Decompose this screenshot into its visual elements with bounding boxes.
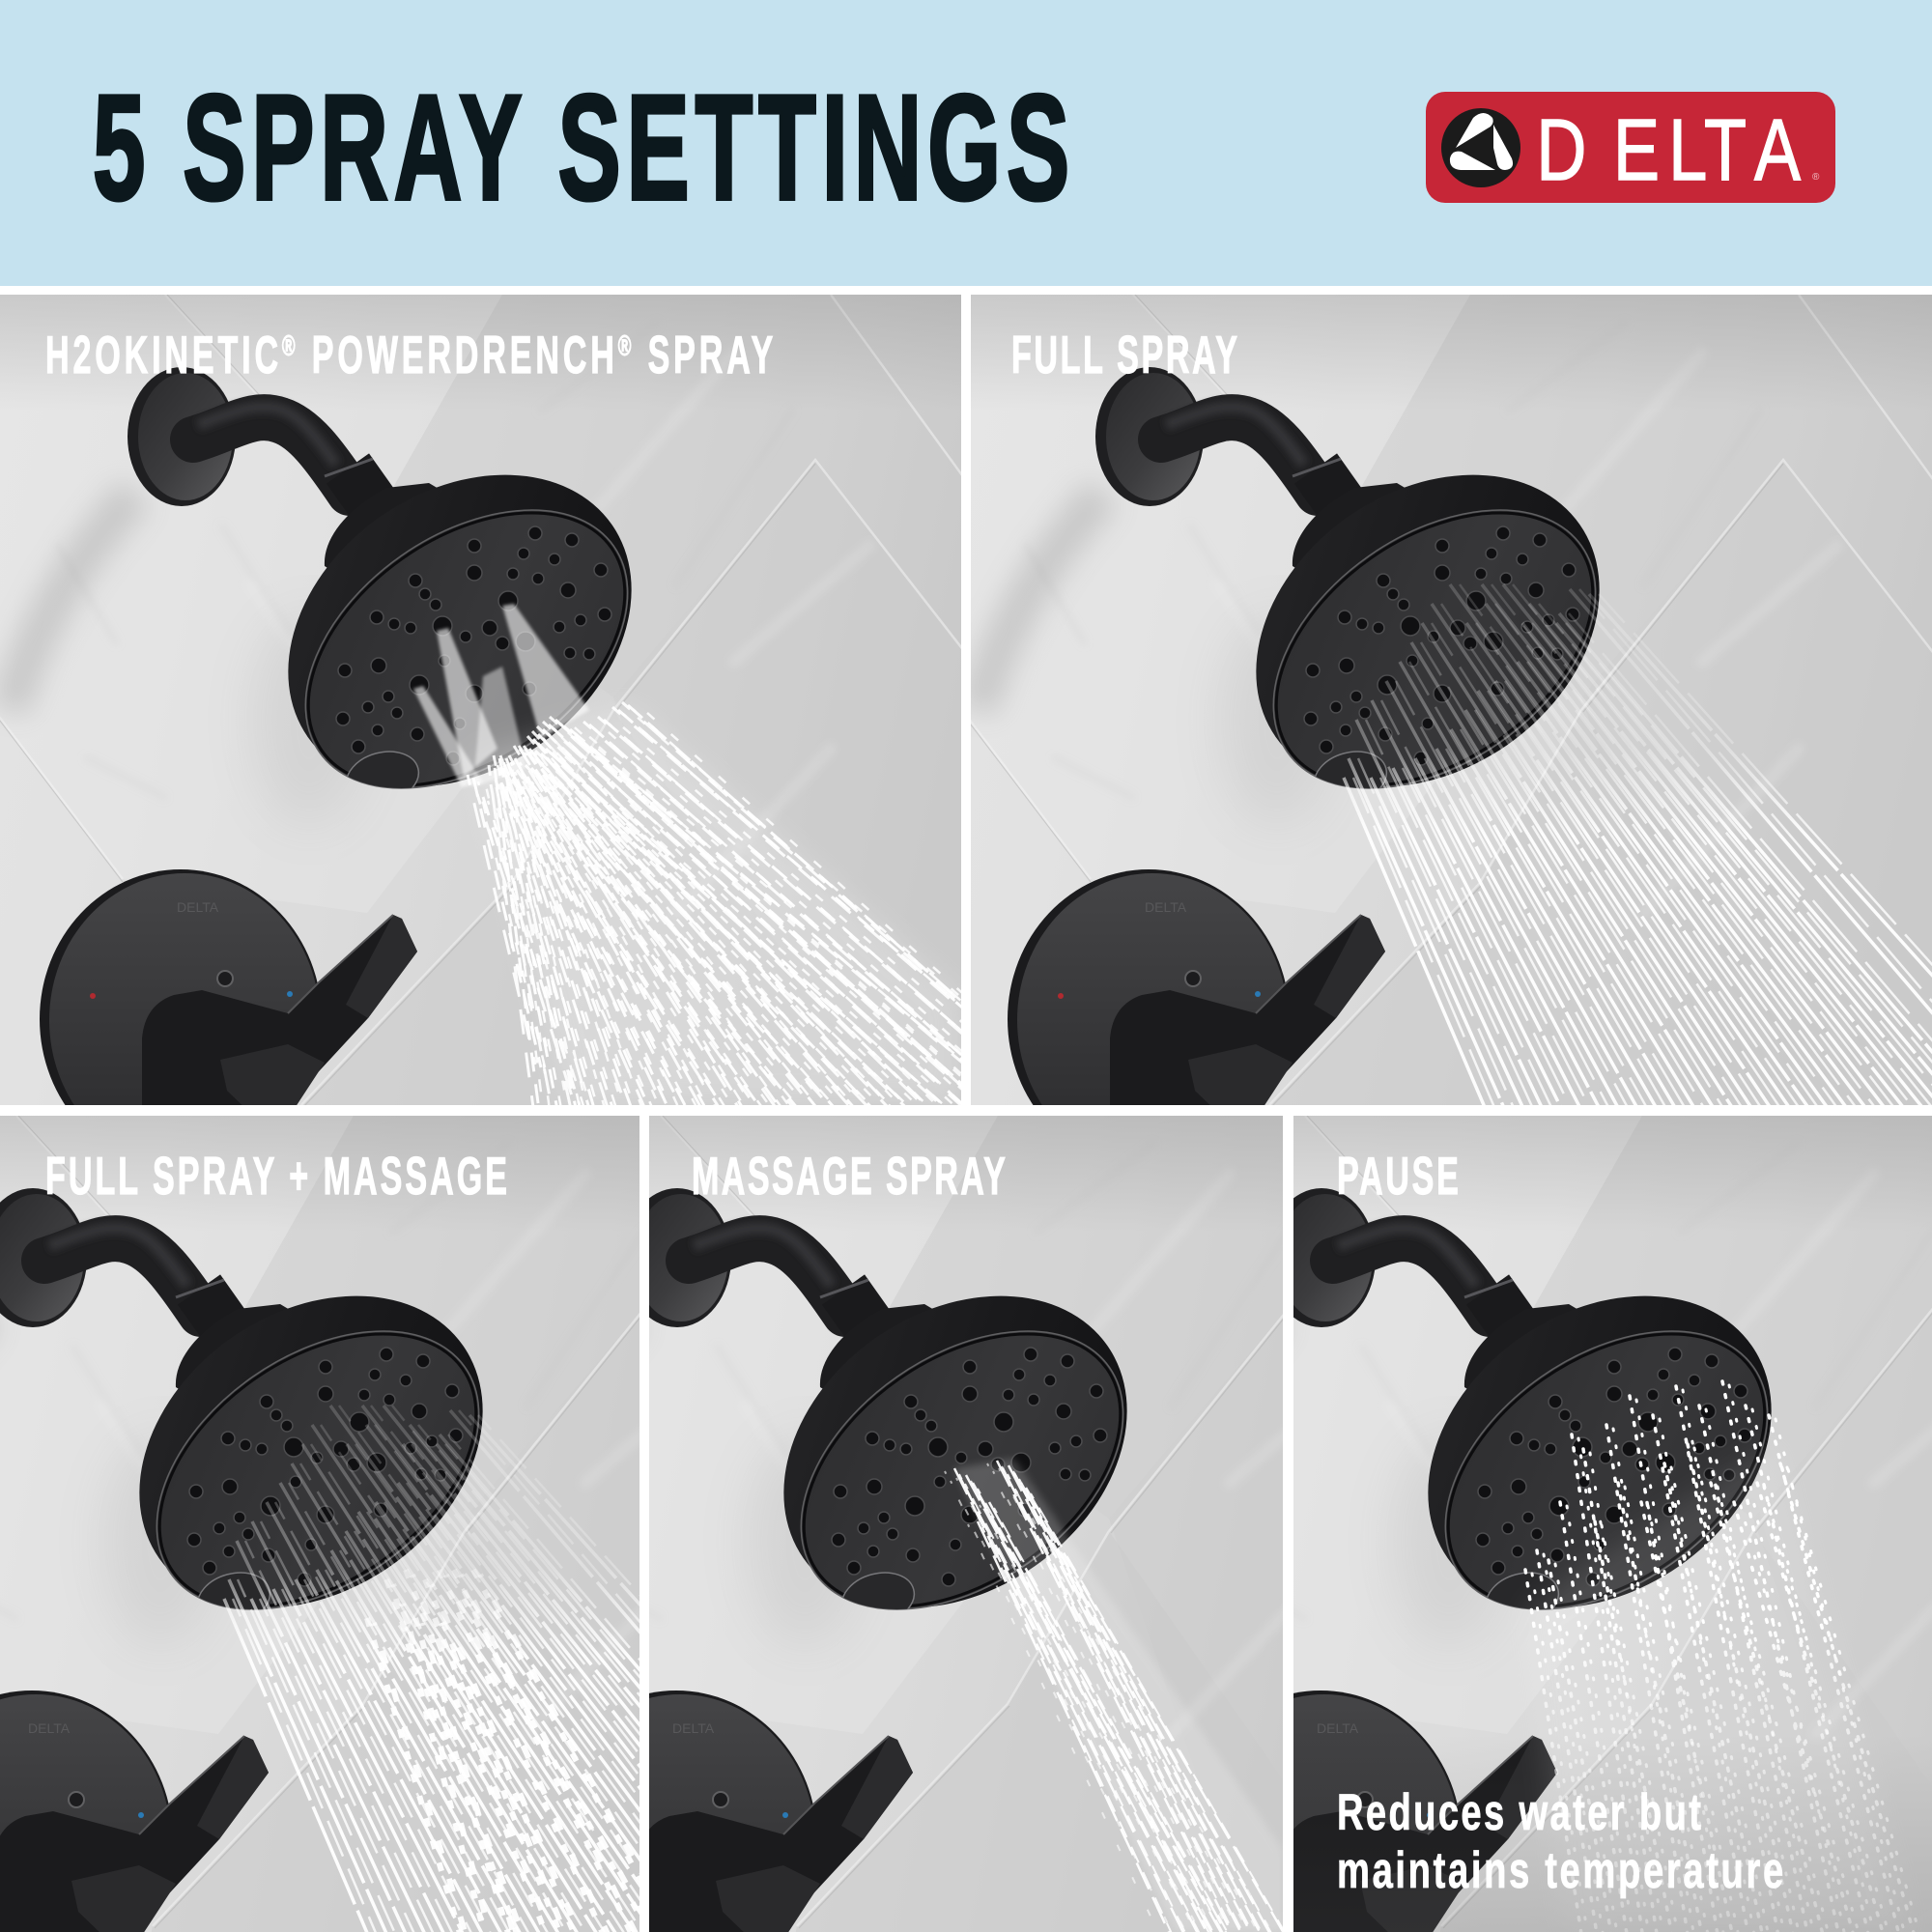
bottom shade <box>1293 1734 1932 1932</box>
heading: H2OKINETIC <box>45 326 278 384</box>
header banner <box>0 0 1932 286</box>
water spray: full + massage <box>224 1406 956 1932</box>
wall background <box>947 1106 1932 1932</box>
heading: POWERDRENCH <box>298 326 614 384</box>
water spray: full <box>1344 584 1932 1125</box>
heading: PAUSE <box>1337 1147 1459 1206</box>
title: 5 SPRAY SETTINGS <box>93 65 1069 232</box>
shower head and valve <box>40 367 692 1169</box>
shower head and valve <box>535 1188 1187 1932</box>
water spray: massage <box>945 1459 1296 1932</box>
heading: FULL SPRAY <box>1011 326 1237 384</box>
heading: FULL SPRAY + MASSAGE <box>45 1147 507 1206</box>
caption <box>1337 1783 1783 1898</box>
shower head and valve <box>1008 367 1660 1169</box>
wall background <box>775 285 1932 1164</box>
panel: H2OKinetic PowerDrench spray <box>0 295 961 1105</box>
heading: SPRAY <box>635 326 773 384</box>
panel: massage spray <box>649 1116 1283 1932</box>
logo: Delta: ® <box>1812 172 1820 183</box>
valve logo: DELTA <box>672 1720 715 1736</box>
caption: Reduces water but <box>1337 1783 1701 1840</box>
heading: MASSAGE SPRAY <box>692 1147 1006 1206</box>
panel: pause <box>1293 1116 1932 1932</box>
caption: maintains temperature <box>1337 1841 1783 1898</box>
panel: full spray + massage <box>0 1116 639 1932</box>
water spray: pause droplets <box>1525 1381 1924 1932</box>
logo: Delta <box>1426 92 1835 203</box>
shower head and valve <box>1179 1188 1832 1932</box>
valve logo: DELTA <box>28 1720 71 1736</box>
wall background <box>0 1106 914 1932</box>
valve logo: DELTA <box>1317 1720 1359 1736</box>
wall background <box>302 1106 1558 1932</box>
logo: Delta: DELTA <box>1536 101 1802 199</box>
valve logo: DELTA <box>177 899 219 915</box>
water spray: powerdrench <box>413 604 1015 1129</box>
heading: ® <box>618 330 631 362</box>
heading: ® <box>282 330 296 362</box>
panel: full spray <box>971 295 1932 1105</box>
valve logo: DELTA <box>1145 899 1187 915</box>
wall background <box>0 285 1063 1164</box>
shower head and valve <box>0 1188 543 1932</box>
